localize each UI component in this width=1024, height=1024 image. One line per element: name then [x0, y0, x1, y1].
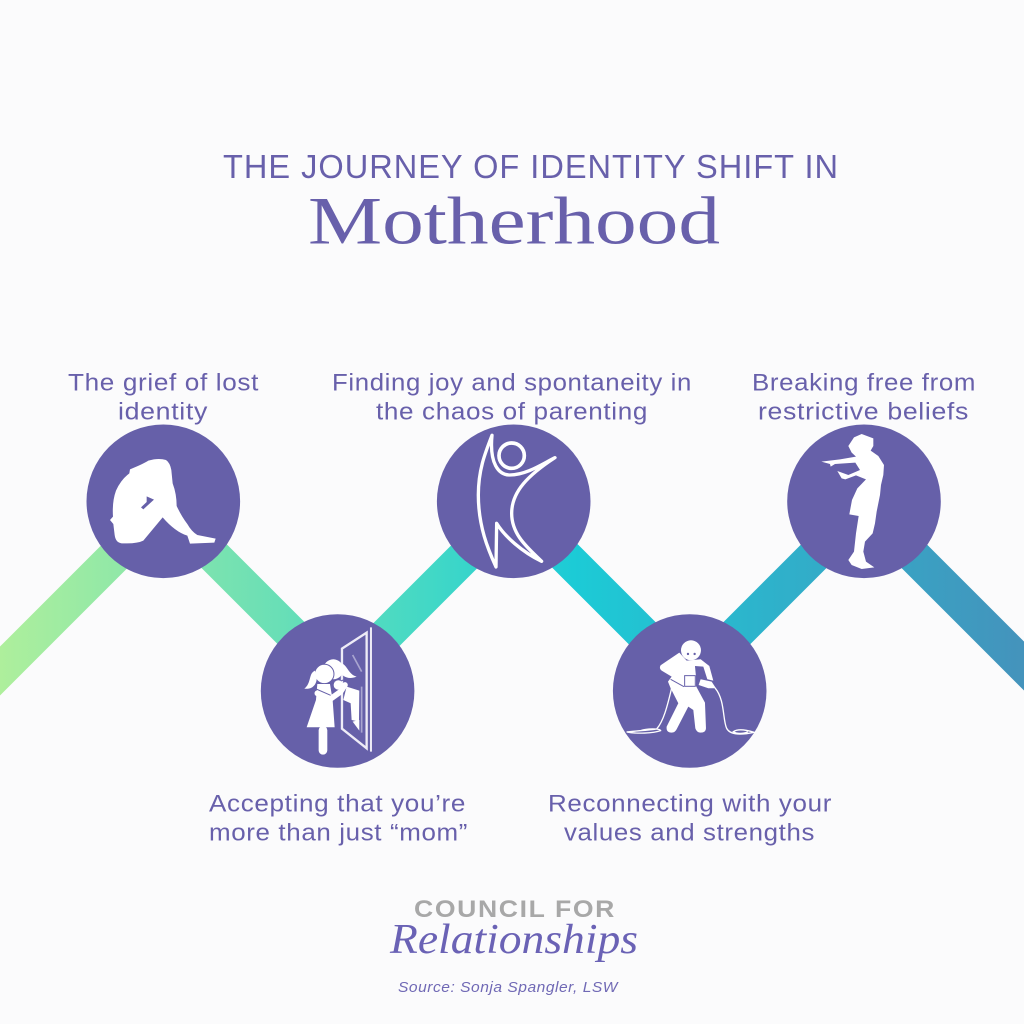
label: more than just mom: Accepting that you’re: [209, 790, 466, 818]
label: grief of lost identity: The grief of lost: [68, 370, 259, 396]
circle: step 1: [86, 424, 240, 578]
label: reconnecting: values and strengths: [564, 820, 815, 846]
zigzag journey line: [0, 506, 1024, 701]
label: more than just mom: more than just “mom”: [209, 820, 468, 846]
circle: step 4: [613, 614, 766, 768]
label: finding joy: the chaos of parenting: [376, 398, 648, 426]
title: THE JOURNEY OF IDENTITY SHIFT IN: [223, 148, 839, 185]
title: Motherhood: [308, 182, 720, 258]
icon: woman silhouette: [821, 434, 884, 569]
circle: step 2: [261, 614, 414, 768]
circle: step 3: [437, 424, 590, 578]
step 1: grief of lost identity: [68, 370, 259, 578]
icon: sitting figure: [110, 459, 216, 544]
label: breaking free: Breaking free from: [752, 370, 976, 396]
step 2: accepting: [209, 614, 468, 846]
label: finding joy: [332, 370, 692, 426]
source credit: Source: Sonja Spangler, LSW: [398, 979, 619, 996]
step 3: finding joy: [332, 370, 692, 578]
label: reconnecting: [548, 790, 832, 846]
label: grief of lost identity: [68, 370, 259, 426]
title: [223, 148, 839, 258]
label: grief of lost identity: identity: [118, 398, 208, 426]
step 5: breaking free: [752, 370, 976, 578]
label: breaking free: [752, 370, 976, 426]
icon: jumping figure: [478, 435, 555, 567]
label: more than just mom: [209, 790, 468, 846]
icon: girl hugging mirror: [304, 627, 371, 755]
logo: Council for Relationships: [389, 896, 638, 963]
logo: Council for Relationships: COUNCIL FOR: [414, 896, 616, 923]
step 4: reconnecting: [548, 614, 832, 846]
logo: Council for Relationships: Relationships: [389, 917, 638, 963]
circle: step 5: [787, 424, 941, 578]
label: breaking free: restrictive beliefs: [758, 398, 969, 426]
icon: figure connecting cables: [627, 640, 754, 734]
label: reconnecting: Reconnecting with your: [548, 790, 832, 818]
label: finding joy: Finding joy and spontaneity in: [332, 370, 692, 396]
